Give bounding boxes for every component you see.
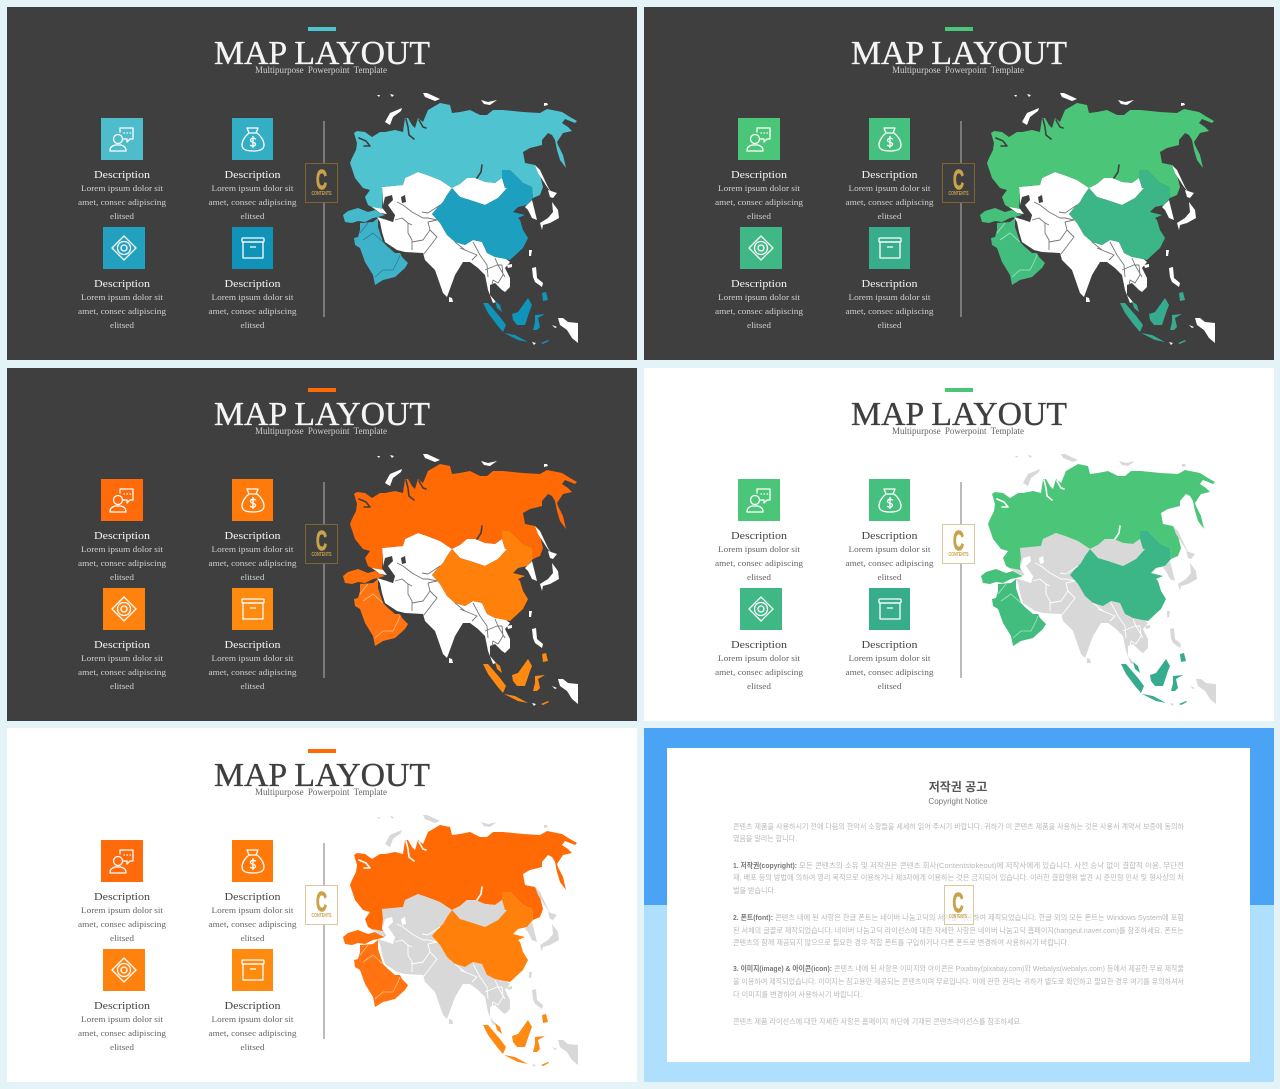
panel: green light slide: amet, consec adipiscing [846, 558, 934, 568]
panel: orange dark slide: Description [94, 530, 151, 542]
panel: green light slide: amet, consec adipiscing [715, 558, 804, 568]
panel: orange dark slide: elitsed [110, 681, 135, 691]
panel: green dark slide: elitsed [878, 320, 902, 330]
panel: copyright notice: 재, 배포 등의 방법에 의하여 영리 목적으로 이용하거나 제3자에게 이용하는 것은 금지되어 있습니다. 이러한 결합행위 발견 시 준민형 민사 및 형사상의 처 [733, 872, 1184, 882]
panel: green light slide: Description [862, 639, 918, 651]
panel: copyright notice: 였음을 알리는 합니다. [733, 833, 797, 843]
panel: copyright notice: 콘텐츠 제품 라이선스에 대한 자세한 사항은 홈페이지 하단에 기재된 콘텐츠라이선스를 참조하세요. [733, 1016, 1022, 1026]
panel: green dark slide: amet, consec adipiscing [846, 197, 934, 207]
panel: orange light slide: Description [94, 1000, 151, 1012]
panel: green light slide: elitsed [878, 681, 902, 691]
panel: copyright notice: 콘텐츠 제품을 사용하시기 전에 다음의 한약서 소항들을 세세히 읽어 주시기 바랍니다. 귀하가 이 콘텐츠 제품을 사용하는 것은 사용서 계약서 보증에 동의하 [733, 821, 1184, 831]
panel: teal dark slide: amet, consec adipiscing [78, 306, 167, 316]
panel: orange light slide: CONTENTS [312, 913, 332, 919]
panel: copyright notice: 된 서체의 글꼴로 제작되었습니다. 네이버 나눔고딕 라이선스에 대한 자세한 사항은 네이버 나눔고딕 홈페이지(hangeul.naver.com)를 참조하세요. 폰트는 [733, 925, 1184, 935]
panel: copyright notice: CONTENTS [949, 914, 967, 920]
panel: green dark slide: elitsed [747, 320, 772, 330]
panel: orange light slide: MAP LAYOUT [214, 757, 430, 794]
panel: orange light slide: Lorem ipsum dolor sit [212, 1014, 294, 1024]
panel: copyright notice: 벌을 받습니다. [733, 885, 776, 895]
panel: teal dark slide: elitsed [110, 211, 135, 221]
panel: orange dark slide [7, 368, 637, 721]
panel: green dark slide: Description [862, 278, 918, 290]
panel: orange dark slide: Lorem ipsum dolor sit [81, 653, 164, 663]
panel: teal dark slide: Description [94, 278, 151, 290]
panel: green dark slide: elitsed [747, 211, 772, 221]
panel: green light slide: Lorem ipsum dolor sit [848, 544, 931, 554]
panel: copyright notice: 저작권 공고 [929, 779, 987, 794]
panel: green dark slide: Description [862, 169, 918, 181]
panel: orange dark slide: elitsed [110, 572, 135, 582]
panel: orange dark slide: amet, consec adipiscing [78, 558, 167, 568]
panel: copyright notice: 콘텐츠의 함께 제공되지 않으므로 필요한 경우 적합 폰트를 구입하거나 다른 폰트로 변경하여 사용하시기 바랍니다. [733, 937, 1069, 947]
panel: orange light slide: Lorem ipsum dolor sit [81, 1014, 164, 1024]
panel: orange light slide: Lorem ipsum dolor sit [212, 905, 294, 915]
panel: orange light slide: Description [224, 891, 281, 903]
panel: teal dark slide: CONTENTS [312, 191, 332, 197]
panel: green light slide: Description [862, 530, 918, 542]
panel: green dark slide: Lorem ipsum dolor sit [848, 292, 931, 302]
panel: green light slide [644, 368, 1274, 721]
panel: teal dark slide: Multipurpose Powerpoint Template [255, 65, 387, 75]
panel: green dark slide: C [953, 164, 964, 195]
panel: green light slide: Lorem ipsum dolor sit [848, 653, 931, 663]
panel: orange dark slide: Description [94, 639, 151, 651]
panel: orange dark slide: Lorem ipsum dolor sit [81, 544, 164, 554]
panel: orange dark slide: Description [224, 639, 281, 651]
panel: orange dark slide: CONTENTS [312, 552, 332, 558]
panel: orange light slide: Lorem ipsum dolor sit [81, 905, 164, 915]
panel: orange dark slide: amet, consec adipiscing [208, 558, 297, 568]
panel: green dark slide: Lorem ipsum dolor sit [718, 292, 801, 302]
panel: teal dark slide: amet, consec adipiscing [208, 306, 297, 316]
panel: orange light slide: elitsed [110, 933, 135, 943]
panel: teal dark slide: elitsed [110, 320, 135, 330]
panel: green dark slide: MAP LAYOUT [851, 35, 1067, 72]
panel: green light slide: Description [731, 639, 788, 651]
panel: green dark slide: CONTENTS [948, 191, 969, 197]
panel: orange dark slide: Lorem ipsum dolor sit [212, 544, 294, 554]
panel: orange dark slide: elitsed [240, 681, 265, 691]
panel: copyright notice: 모든 콘텐츠의 소유 및 저작권은 콘텐츠 회사(Contentstokeout)에 저작사에게 있습니다. 사전 승낙 없이 결합적 이용, 무단전 [799, 860, 1184, 870]
panel: orange light slide: amet, consec adipiscing [78, 1028, 167, 1038]
panel: orange dark slide: amet, consec adipiscing [208, 667, 297, 677]
panel: teal dark slide: Lorem ipsum dolor sit [81, 183, 164, 193]
panel: orange dark slide: MAP LAYOUT [214, 396, 430, 433]
panel: copyright notice: 콘텐츠 내에 된 사항은 이미지와 아이콘은 Pixabay(pixabay.com)와 Webalys(webalys.com) 등에서 제공한 무료 제작물 [834, 963, 1184, 973]
panel: teal dark slide: Description [224, 278, 281, 290]
panel: green light slide: C [953, 525, 964, 556]
panel: teal dark slide [7, 7, 637, 360]
panel: orange light slide [7, 728, 637, 1082]
panel: teal dark slide: amet, consec adipiscing [208, 197, 297, 207]
panel: teal dark slide: MAP LAYOUT [214, 35, 430, 72]
panel: green dark slide: Multipurpose Powerpoint Template [892, 65, 1024, 75]
panel: orange light slide: amet, consec adipiscing [78, 919, 167, 929]
panel: teal dark slide: elitsed [240, 320, 265, 330]
panel: green dark slide: Lorem ipsum dolor sit [718, 183, 801, 193]
panel: teal dark slide: C [316, 164, 327, 195]
panel: copyright notice: Copyright Notice [928, 797, 988, 806]
panel: green light slide: elitsed [747, 572, 772, 582]
panel: green light slide: MAP LAYOUT [851, 396, 1067, 433]
panel: copyright notice: 콘텐츠 내에 된 사항은 한글 폰트는 네이버 나눔고딕의 서체를 이용하여 제작되었습니다. 한글 외의 모든 폰트는 Windows System에 포함 [775, 912, 1184, 922]
panel: orange dark slide: C [316, 525, 327, 556]
panel: copyright notice: 2. 폰트(font): [733, 913, 773, 922]
panel: orange light slide: elitsed [240, 933, 265, 943]
panel: copyright notice: C [952, 887, 964, 918]
panel: copyright notice: 다 이미지를 변경하여 사용하시기 바랍니다. [733, 989, 862, 999]
panel: copyright notice: 1. 저작권(copyright): [733, 860, 797, 870]
panel: green light slide: CONTENTS [948, 552, 969, 558]
panel: orange light slide: Multipurpose Powerpoint Template [255, 787, 387, 797]
panel: orange light slide: C [316, 886, 327, 917]
panel: green light slide: elitsed [878, 572, 902, 582]
panel: orange light slide: Description [224, 1000, 281, 1012]
panel: teal dark slide: elitsed [240, 211, 265, 221]
panel: green light slide: Lorem ipsum dolor sit [718, 653, 801, 663]
panel: green light slide: Description [731, 530, 788, 542]
panel: copyright notice: 3. 이미지(image) & 아이콘(icon): [733, 963, 832, 973]
panel: green light slide: amet, consec adipiscing [846, 667, 934, 677]
panel: green dark slide: amet, consec adipiscing [846, 306, 934, 316]
panel: green dark slide: Description [731, 278, 788, 290]
panel: teal dark slide: Description [224, 169, 281, 181]
panel: orange light slide: elitsed [110, 1042, 135, 1052]
panel: green dark slide: elitsed [878, 211, 902, 221]
panel: teal dark slide: amet, consec adipiscing [78, 197, 167, 207]
panel: orange light slide: Description [94, 891, 151, 903]
panel: green dark slide [644, 7, 1274, 360]
panel: orange light slide: amet, consec adipiscing [208, 919, 297, 929]
panel: orange dark slide: Description [224, 530, 281, 542]
panel: orange light slide: elitsed [240, 1042, 265, 1052]
panel: teal dark slide: Lorem ipsum dolor sit [212, 292, 294, 302]
panel: green light slide: elitsed [747, 681, 772, 691]
panel: green light slide: Lorem ipsum dolor sit [718, 544, 801, 554]
panel: green dark slide: Lorem ipsum dolor sit [848, 183, 931, 193]
panel: teal dark slide: Lorem ipsum dolor sit [81, 292, 164, 302]
panel: green dark slide: Description [731, 169, 788, 181]
panel: orange dark slide: Lorem ipsum dolor sit [212, 653, 294, 663]
panel: orange dark slide: elitsed [240, 572, 265, 582]
panel: green light slide: Multipurpose Powerpoint Template [892, 426, 1024, 436]
panel: orange dark slide: Multipurpose Powerpoint Template [255, 426, 387, 436]
panel: orange dark slide: amet, consec adipiscing [78, 667, 167, 677]
panel: green dark slide: amet, consec adipiscing [715, 306, 804, 316]
panel: green light slide: amet, consec adipiscing [715, 667, 804, 677]
panel: teal dark slide: Lorem ipsum dolor sit [212, 183, 294, 193]
panel: copyright notice [644, 728, 1274, 1082]
panel: teal dark slide: Description [94, 169, 151, 181]
panel: orange light slide: amet, consec adipiscing [208, 1028, 297, 1038]
panel: copyright notice: 을 이용하여 제작되었습니다. 이미지는 참고용만 제공되는 콘텐츠이며 무료입니다. 이에 관한 권리는 귀하가 별도로 확인하고 필요한 경우 여기를 유의하셔서 [733, 976, 1184, 986]
panel: green dark slide: amet, consec adipiscing [715, 197, 804, 207]
